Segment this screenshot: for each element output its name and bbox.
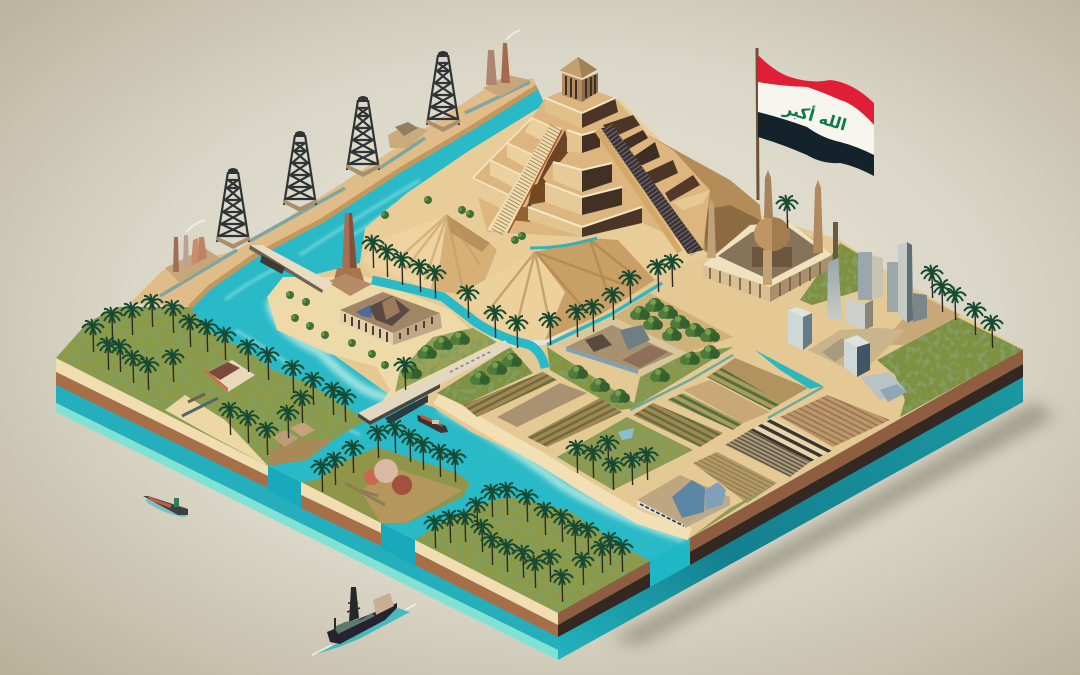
- beach strip: [437, 398, 690, 534]
- orchard plot: [557, 417, 693, 490]
- tier edges: [528, 98, 642, 227]
- flagpole: [757, 48, 758, 200]
- tower F: [913, 293, 927, 322]
- olive band: [633, 347, 733, 408]
- sand hills: [360, 100, 762, 340]
- palms: island: [311, 420, 466, 492]
- southern land: [415, 497, 650, 637]
- plowed field: [780, 395, 890, 447]
- peninsula shrubs: [286, 291, 389, 369]
- olive strip beside canal: [547, 347, 640, 410]
- hilltop temple: [559, 57, 598, 102]
- lower bridge: [358, 340, 511, 425]
- olive below bridge: [437, 347, 533, 405]
- palms: left land: [82, 294, 356, 455]
- island domed buildings: [345, 459, 412, 505]
- center right dark faces: [582, 98, 642, 237]
- cargo ship: [312, 587, 416, 655]
- eastern land base: [267, 215, 1023, 565]
- river barge: [417, 414, 448, 433]
- tower A: [827, 222, 842, 320]
- palms: east: [921, 265, 1003, 348]
- tributary canal: [372, 280, 545, 368]
- dark niches: [510, 130, 570, 222]
- eastern green land: [877, 317, 1023, 417]
- left stepped faces: [473, 118, 552, 212]
- plaza: [808, 328, 905, 375]
- ancient palace: [340, 292, 442, 345]
- green shrub field: [613, 293, 733, 353]
- thin canal: [547, 283, 662, 345]
- right water wall: [558, 349, 1023, 660]
- farmhouse: [182, 360, 255, 416]
- vegetation behind towers: [800, 243, 862, 305]
- huts: [272, 422, 315, 447]
- right stepped blocks: [623, 130, 710, 210]
- striped field: [750, 418, 833, 462]
- central compound: [557, 317, 687, 377]
- tower E: [898, 242, 913, 323]
- center left faces: [528, 98, 582, 237]
- factory: lower left: [165, 220, 220, 283]
- irrigation channels: [630, 355, 823, 418]
- hill shrubs: [381, 196, 526, 244]
- hill vegetation behind mosque: [780, 220, 823, 262]
- soil side: [56, 372, 268, 488]
- oil derricks: [216, 51, 460, 249]
- hill behind ziggurat: [648, 135, 762, 258]
- small ship: [143, 496, 188, 520]
- palms: southern land: [424, 482, 633, 602]
- small works on bank: [388, 122, 428, 148]
- tower H: [844, 335, 870, 377]
- river water: [190, 78, 690, 613]
- stepped ziggurat: [473, 57, 710, 254]
- palms: orchard: [566, 435, 658, 490]
- left staircase: [487, 125, 562, 233]
- peninsula sand: [267, 277, 510, 405]
- waterfront hotel: [637, 475, 730, 528]
- tower D: [887, 262, 898, 312]
- tower G: [788, 307, 812, 350]
- island: [301, 447, 470, 546]
- left water wall: [56, 358, 558, 660]
- left land: [56, 307, 367, 488]
- flag inscription: الله أكبر: [781, 97, 849, 135]
- tan field: [693, 452, 777, 503]
- tower B: [845, 252, 873, 330]
- upper bridge: [249, 245, 333, 293]
- farm fields: [437, 345, 890, 538]
- mosque: [703, 170, 832, 302]
- low warehouse: [860, 372, 907, 402]
- brown rise behind east land: [880, 296, 960, 345]
- right staircase: [597, 127, 703, 254]
- factory: upper right: [483, 30, 530, 97]
- hill canal: [530, 238, 597, 248]
- upper bank with canal: [130, 78, 537, 307]
- Iraqi flag: [758, 55, 874, 176]
- north-of-bridge orchard: [395, 328, 497, 392]
- crop rows: [633, 403, 723, 447]
- palms: central: [362, 195, 798, 390]
- minarets: [707, 170, 823, 285]
- left dune: [362, 215, 497, 297]
- lower dune: [458, 238, 655, 340]
- ziggurat mass: [473, 85, 710, 250]
- map shadow: [610, 402, 1056, 645]
- sand side: [56, 358, 268, 476]
- palm groves: [82, 195, 1003, 602]
- tower C: [872, 255, 883, 300]
- modern towers: [788, 222, 927, 402]
- brick minaret: [327, 213, 372, 296]
- reservoir: [755, 350, 823, 389]
